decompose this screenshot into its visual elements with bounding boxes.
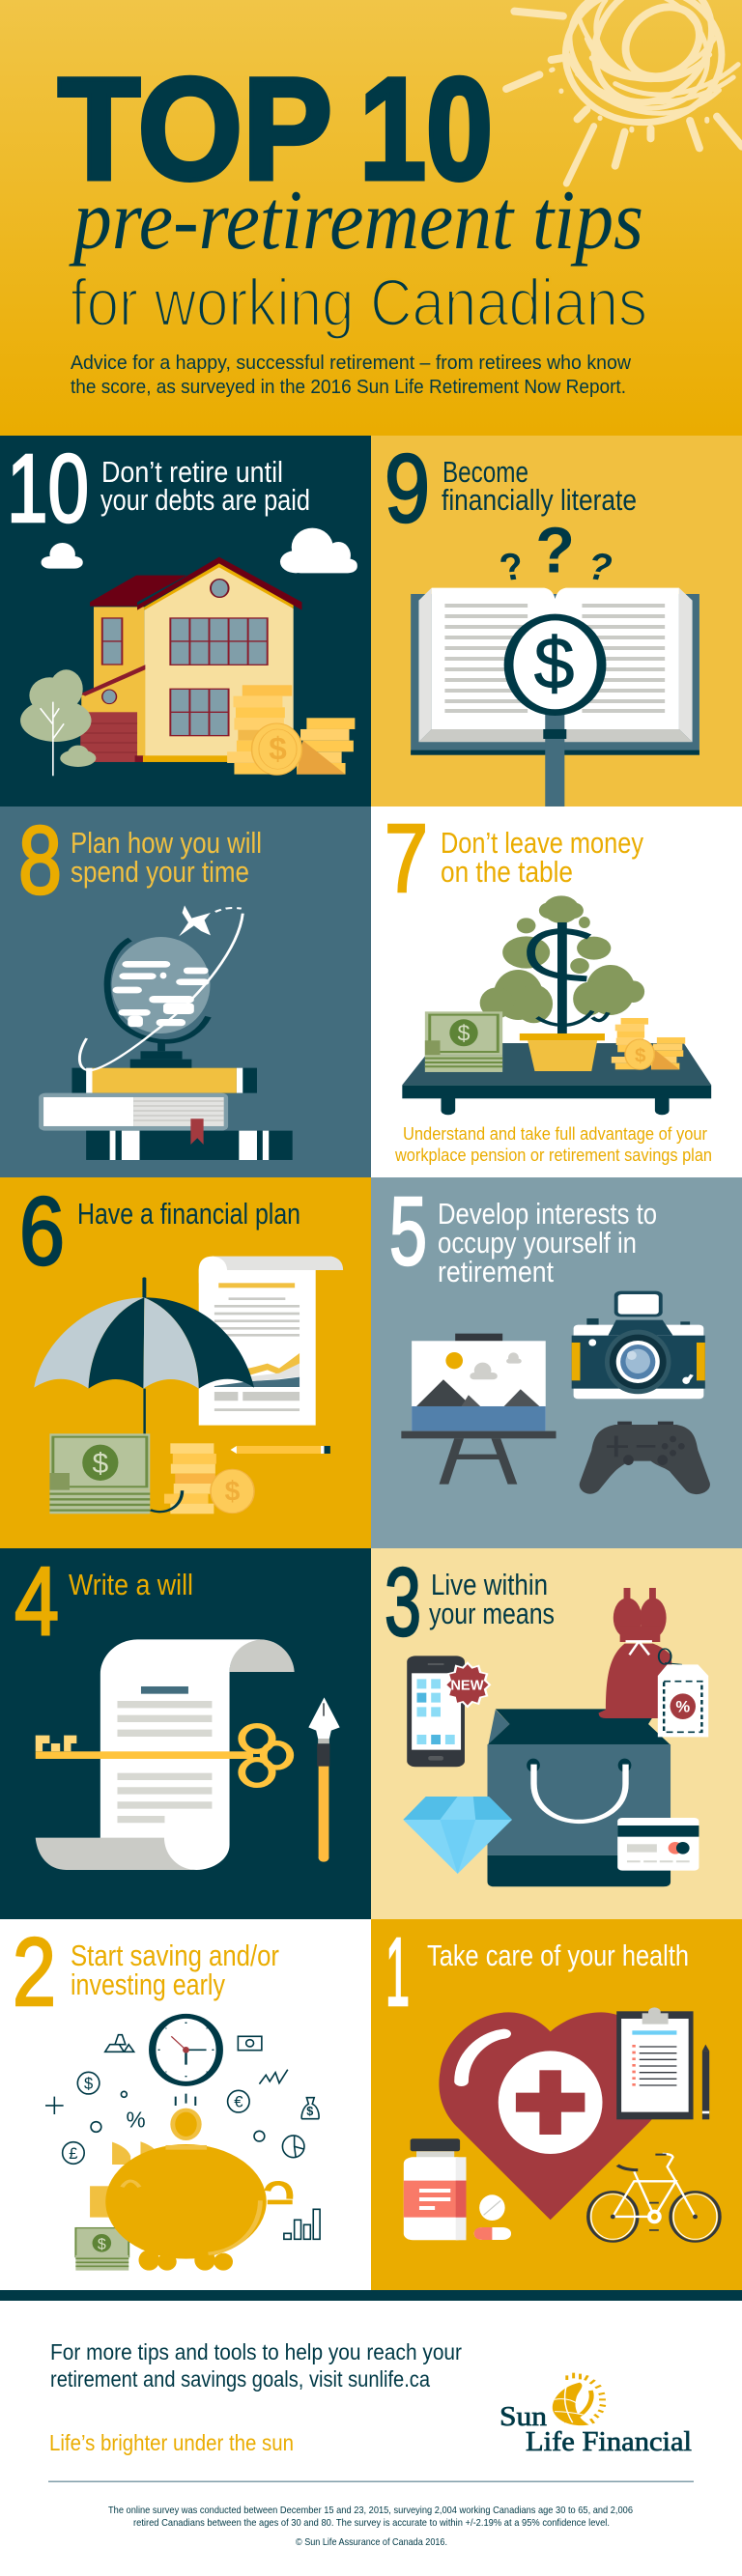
icon: open book with magnifying glass bbox=[411, 516, 699, 807]
panel: tip 1 bbox=[371, 1918, 742, 2290]
title: TOP 10 bbox=[58, 47, 493, 210]
panel: tip 10 bbox=[0, 435, 371, 807]
caption tip 7: Understand and take full advantage of your bbox=[403, 1124, 707, 1144]
icon: diamond bbox=[403, 1797, 512, 1874]
panel: tip 3 bbox=[371, 1548, 742, 1919]
icon: open book with magnifying glass: $ bbox=[534, 622, 574, 703]
icon: medicine bottle and pills bbox=[404, 2138, 511, 2240]
heading tip 4: Write a will bbox=[69, 1568, 193, 1601]
caption tip 7: workplace pension or retirement savings plan bbox=[394, 1146, 712, 1165]
heading tip 8: Plan how you will bbox=[71, 826, 262, 860]
heading tip 3: Live within bbox=[431, 1568, 548, 1601]
panel: tip 8 bbox=[0, 807, 371, 1177]
panel: tip 1: 1 bbox=[385, 1918, 410, 2026]
subtitle: pre-retirement tips: pre-retirement tips bbox=[69, 174, 643, 268]
icon: money tree on table: $ bbox=[458, 1020, 471, 1045]
icon: red dress bbox=[599, 1588, 676, 1718]
icon: umbrella, report, money and coins: $ bbox=[93, 1448, 108, 1480]
icon: financial line icons: $ bbox=[84, 2075, 93, 2093]
call to action text bbox=[50, 2339, 462, 2392]
subtitle: for working Canadians: for working Canadians bbox=[71, 266, 647, 340]
icon: umbrella, report, money and coins bbox=[34, 1257, 343, 1514]
panel: header bbox=[0, 0, 742, 436]
icon: painting easel bbox=[401, 1334, 556, 1485]
icon: smartphone with NEW badge bbox=[407, 1656, 490, 1767]
heading tip 2 bbox=[71, 1939, 279, 2001]
icon: heart with medical cross bbox=[439, 2012, 663, 2220]
heading tip 7 bbox=[441, 826, 643, 889]
icon: price tag bbox=[658, 1649, 708, 1737]
panel: tip 5 bbox=[371, 1177, 742, 1548]
icon: scribbled sun bbox=[506, 0, 742, 184]
icon: open book with magnifying glass: ? bbox=[535, 516, 575, 587]
heading tip 1: Take care of your health bbox=[427, 1939, 689, 1972]
heading tip 10 bbox=[100, 455, 310, 517]
icon: financial line icons: % bbox=[127, 2107, 146, 2132]
icon: camera bbox=[572, 1291, 705, 1399]
heading tip 9: Become bbox=[442, 455, 528, 489]
number 5: 5 bbox=[389, 1177, 427, 1286]
number 2: 2 bbox=[13, 1918, 56, 2026]
heading tip 3: your means bbox=[429, 1597, 555, 1630]
icon: game controller bbox=[580, 1422, 710, 1494]
heading tip 9: financially literate bbox=[442, 483, 637, 517]
tagline: Life’s brighter under the sun bbox=[49, 2430, 294, 2455]
icon: credit card bbox=[617, 1818, 699, 1871]
logo: Sun Life Financial: Sun bbox=[499, 2402, 547, 2432]
intro text: the score, as surveyed in the 2016 Sun Life Retirement Now Report. bbox=[71, 377, 626, 398]
survey fine print: © Sun Life Assurance of Canada 2016. bbox=[296, 2536, 447, 2548]
heading tip 8 bbox=[71, 826, 262, 889]
heading tip 10: your debts are paid bbox=[100, 483, 310, 517]
dark band bbox=[0, 2290, 742, 2301]
heading tip 8: spend your time bbox=[71, 855, 249, 889]
icon: will scroll, key and pen bbox=[36, 1639, 340, 1870]
number 4: 4 bbox=[14, 1547, 59, 1656]
survey fine print: retired Canadians between the ages of 30 and 80. The survey is accurate to within +/-2.19% at a 95% confidence level. bbox=[133, 2517, 610, 2529]
heading tip 5: occupy yourself in bbox=[438, 1226, 637, 1260]
number 8: 8 bbox=[18, 807, 62, 915]
number 3: 3 bbox=[385, 1548, 421, 1656]
panel: tip 9 bbox=[371, 435, 742, 807]
heading tip 7: on the table bbox=[441, 855, 573, 889]
number 7: 7 bbox=[385, 805, 428, 913]
number 9: 9 bbox=[385, 435, 430, 543]
icon: clipboard and pencil bbox=[616, 2007, 709, 2119]
icon: smartphone with NEW badge: NEW bbox=[450, 1678, 484, 1693]
heading tip 6: Have a financial plan bbox=[77, 1197, 300, 1231]
number 10: 10 bbox=[7, 435, 89, 543]
heading tip 3 bbox=[429, 1568, 555, 1630]
number 6: 6 bbox=[19, 1177, 65, 1286]
heading tip 2: investing early bbox=[71, 1967, 225, 2001]
icon: financial line icons: £ bbox=[69, 2144, 78, 2163]
title: TOP 10: 10 bbox=[359, 47, 493, 210]
panel: tip 2 bbox=[0, 1918, 371, 2290]
icon: money tree on table: $ bbox=[635, 1044, 646, 1066]
survey fine print bbox=[108, 2505, 633, 2548]
icon: open book with magnifying glass: ? bbox=[496, 545, 528, 589]
heading tip 5 bbox=[438, 1197, 657, 1288]
icon: financial line icons: € bbox=[234, 2093, 243, 2111]
heading tip 10: Don’t retire until bbox=[101, 455, 283, 489]
icon: house with clouds, tree and coins: $ bbox=[269, 732, 287, 768]
intro text bbox=[71, 353, 632, 398]
logo: Sun Life Financial: Life Financial bbox=[526, 2427, 692, 2457]
call to action text: For more tips and tools to help you reach your bbox=[50, 2339, 462, 2364]
icon: globe on stack of books with plane bbox=[39, 905, 293, 1160]
survey fine print: The online survey was conducted between December 15 and 23, 2015, surveying 2,004 working Canadians age 30 to 65, and 2,006 bbox=[108, 2505, 633, 2516]
heading tip 7: Don’t leave money bbox=[441, 826, 643, 860]
heading tip 2: Start saving and/or bbox=[71, 1939, 279, 1972]
icon: price tag: % bbox=[675, 1698, 690, 1716]
call to action text: retirement and savings goals, visit sunlife.ca bbox=[50, 2366, 430, 2392]
icon: house with clouds, tree and coins bbox=[20, 528, 357, 776]
heading tip 5: Develop interests to bbox=[438, 1197, 657, 1231]
panel: tip 6 bbox=[0, 1177, 371, 1548]
panel: tip 7 bbox=[371, 805, 742, 1177]
icon: open book with magnifying glass: ? bbox=[583, 545, 618, 589]
icon: bicycle bbox=[588, 2154, 720, 2242]
heading tip 9 bbox=[442, 455, 637, 517]
intro text: Advice for a happy, successful retirement – from retirees who know bbox=[71, 353, 632, 374]
icon: shopping bag bbox=[487, 1709, 671, 1886]
title: TOP 10: TOP bbox=[58, 47, 332, 210]
logo: Sun Life Financial bbox=[499, 2373, 692, 2457]
icon: money tree on table bbox=[402, 895, 711, 1115]
icon: umbrella, report, money and coins: $ bbox=[225, 1476, 241, 1507]
icon: piggy bank with coin and money: $ bbox=[98, 2236, 106, 2252]
icon: clock bbox=[153, 2016, 219, 2083]
panel: tip 4 bbox=[0, 1547, 371, 1919]
icon: piggy bank with coin and money bbox=[75, 2109, 293, 2271]
caption tip 7 bbox=[394, 1124, 712, 1165]
heading tip 5: retirement bbox=[438, 1255, 554, 1288]
panel: footer bbox=[48, 2339, 694, 2548]
icon: financial line icons bbox=[45, 2035, 320, 2239]
icon: financial line icons: $ bbox=[306, 2105, 313, 2118]
